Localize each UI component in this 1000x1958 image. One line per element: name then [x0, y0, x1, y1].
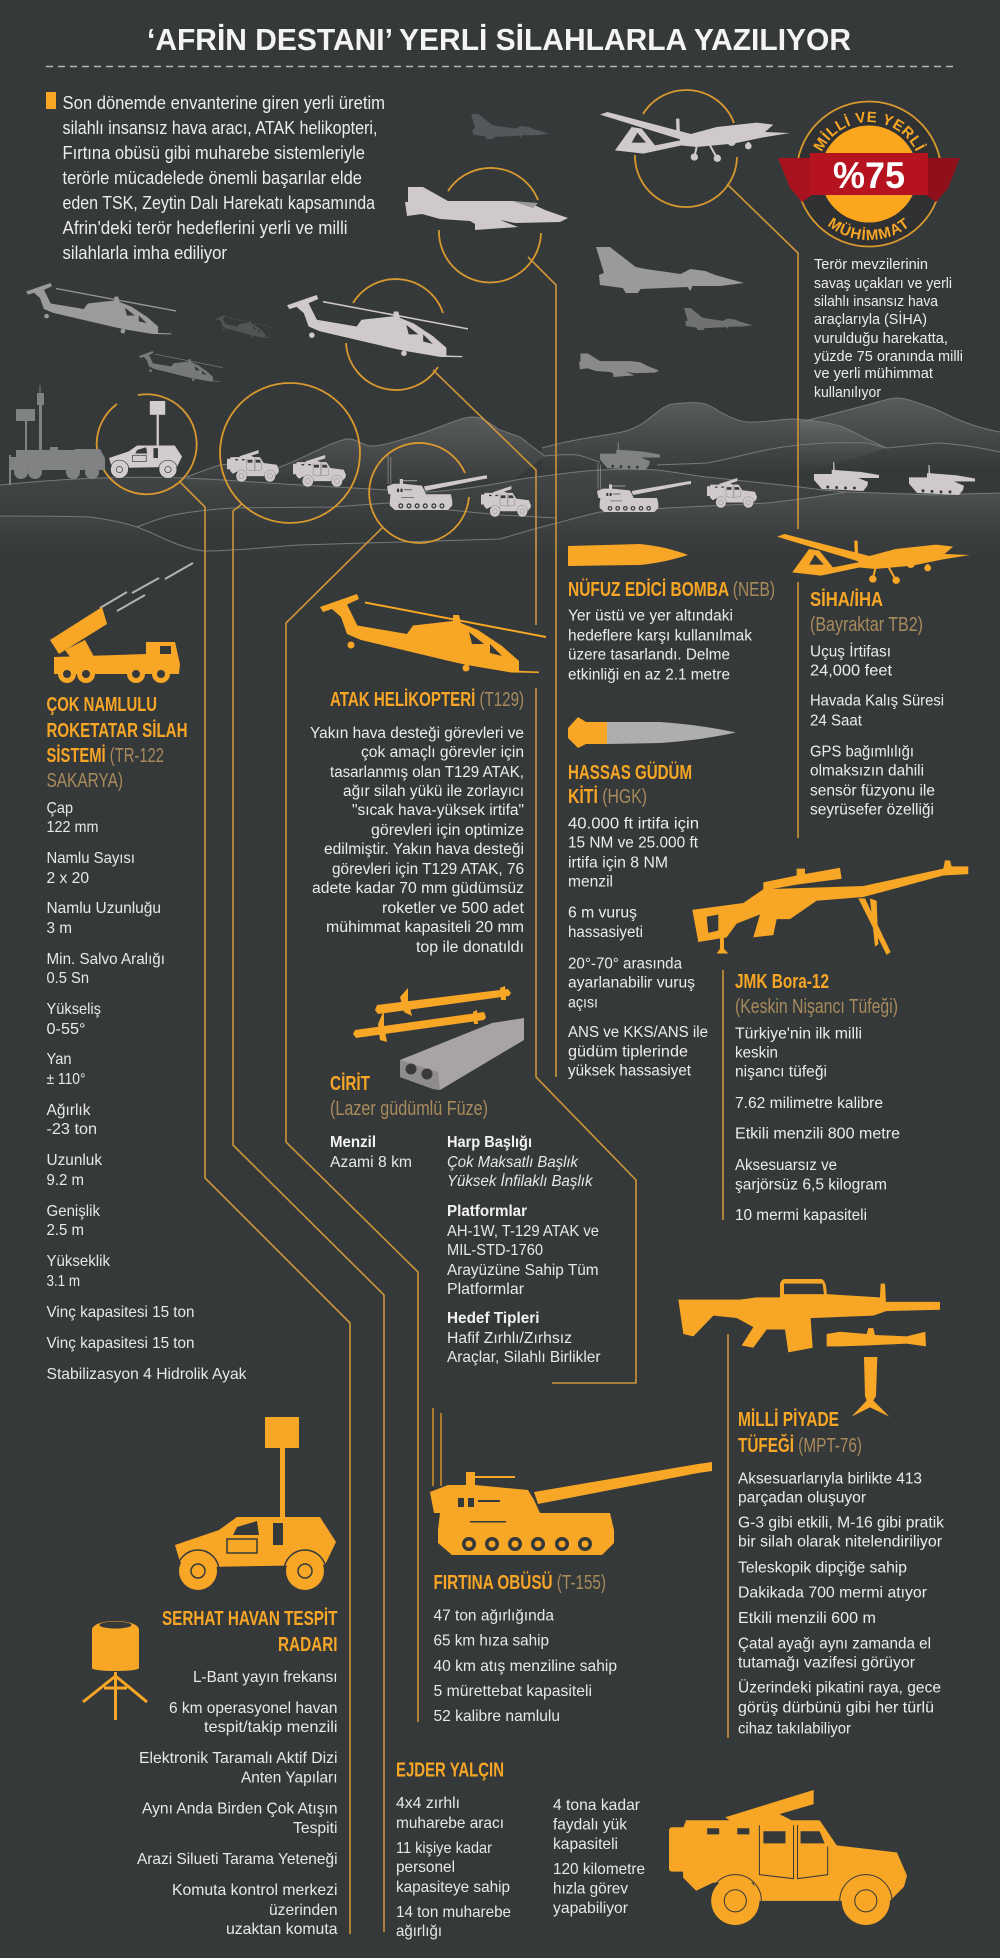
specifications: [330, 1134, 601, 1366]
description left column: 11 kişiye kadar: [396, 1840, 493, 1857]
terrain: mountain silhouettes: [0, 398, 1000, 560]
description left column: ağırlığı: [396, 1923, 442, 1940]
description: [738, 1470, 944, 1738]
specs list: 0.5 Sn: [46, 970, 89, 987]
description right column: [553, 1797, 645, 1917]
specifications: Hedef Tipleri: [447, 1310, 540, 1327]
specifications: Çok Maksatlı Başlık: [447, 1154, 579, 1171]
badge: 75% domestic munitions: MİLLİ VE YERLİ: [813, 112, 928, 152]
description: G-3 gibi etkili, M-16 gibi pratik: [738, 1514, 944, 1532]
description: güdüm tiplerinde: [568, 1044, 688, 1060]
specifications: Platformlar: [447, 1281, 525, 1298]
description: Arazi Silueti Tarama Yeteneği: [137, 1851, 338, 1868]
description: 7.62 milimetre kalibre: [735, 1095, 883, 1112]
description: roketler ve 500 adet: [382, 900, 525, 917]
heading: [568, 761, 692, 808]
description: 24,000 feet: [810, 662, 893, 680]
intro text block: silahlarla imha ediliyor: [62, 242, 227, 263]
specs list: Yükseliş: [46, 1001, 101, 1018]
description: adete kadar 70 mm güdümsüz: [312, 880, 524, 897]
specifications: Harp Başlığı: [447, 1134, 532, 1151]
description: 52 kalibre namlulu: [434, 1708, 560, 1725]
icon: ATAK helicopter: [320, 594, 546, 673]
description: "sıcak hava-yüksek irtifa": [352, 802, 524, 819]
description: görevleri için optimize: [371, 822, 524, 839]
description: Yer üstü ve yer altındaki: [568, 608, 733, 624]
description: nişancı tüfeği: [735, 1064, 827, 1080]
badge caption text: vurulduğu harekatta,: [814, 330, 948, 347]
description: 10 mermi kapasiteli: [735, 1207, 867, 1224]
panel: JMK Bora-12 sniper rifle: [692, 860, 968, 1224]
heading: CİRİT: [330, 1072, 370, 1095]
badge caption text: savaş uçakları ve yerli: [814, 275, 952, 292]
heading: KİTİ (HGK): [568, 785, 647, 808]
specs list: Yükseklik: [46, 1253, 111, 1270]
description: [137, 1669, 338, 1938]
specifications: AH-1W, T-129 ATAK ve: [447, 1223, 599, 1240]
heading: [162, 1607, 338, 1656]
heading: SERHAT HAVAN TESPİT: [162, 1607, 338, 1630]
specifications: Yüksek İnfilaklı Başlık: [447, 1171, 593, 1190]
specs list: 2.5 m: [46, 1222, 84, 1239]
heading: (Keskin Nişancı Tüfeği): [735, 996, 898, 1018]
description: Komuta kontrol merkezi: [172, 1882, 338, 1899]
description right column: 120 kilometre: [553, 1861, 645, 1878]
description left column: 14 ton muharebe: [396, 1904, 511, 1921]
specifications: Azami 8 km: [330, 1154, 412, 1171]
description: [810, 642, 944, 818]
description: [735, 1026, 900, 1224]
panel: NEB penetrator bomb: [568, 544, 775, 684]
description: çok amaçlı görevler için: [361, 744, 524, 761]
description: 6 km operasyonel havan: [169, 1700, 338, 1717]
specs list: Yan: [46, 1051, 72, 1068]
panel: ATAK helicopter T129: [310, 594, 546, 956]
aircraft silhouettes: [26, 112, 790, 382]
icon: MPT-76 rifle with scope and grip: [678, 1279, 940, 1417]
description: seyrüsefer özelliği: [810, 802, 934, 818]
badge caption text: araçlarıyla (SİHA): [814, 310, 927, 328]
description: üzere tasarlandı. Delme: [568, 646, 730, 664]
description: görevleri için T129 ATAK, 76: [332, 861, 524, 878]
heading: EJDER YALÇIN: [396, 1760, 504, 1782]
callout circles and connector lines: [97, 90, 798, 1934]
heading: HASSAS GÜDÜM: [568, 761, 692, 784]
description: ayarlanabilir vuruş: [568, 974, 695, 992]
description: yüksek hassasiyet: [568, 1062, 692, 1080]
description left column: personel: [396, 1859, 455, 1876]
intro text block: eden TSK, Zeytin Dalı Harekatı kapsamında: [62, 192, 376, 213]
icon: Ejder Yalcin vehicle: [669, 1790, 907, 1927]
description: Tespiti: [293, 1820, 338, 1837]
description: Etkili menzili 600 m: [738, 1610, 876, 1627]
description: Aksesuarlarıyla birlikte 413: [738, 1470, 922, 1488]
heading: (Bayraktar TB2): [810, 614, 923, 636]
specifications: Araçlar, Silahlı Birlikler: [447, 1349, 601, 1366]
description: Havada Kalış Süresi: [810, 692, 944, 710]
heading: ROKETATAR SİLAH: [46, 719, 188, 742]
badge caption text: silahlı insansız hava: [814, 293, 939, 310]
description: Elektronik Taramalı Aktif Dizi: [139, 1750, 338, 1767]
specs list: Vinç kapasitesi 15 ton: [46, 1304, 194, 1321]
specs list: -23 ton: [46, 1121, 97, 1138]
description: cihaz takılabiliyor: [738, 1720, 851, 1738]
heading: SİHA/İHA: [810, 588, 883, 611]
specs list: Çap: [46, 800, 73, 817]
icon: tripod radar: [83, 1621, 147, 1720]
specs list: Min. Salvo Aralığı: [46, 951, 165, 968]
specs list: 2 x 20: [46, 870, 89, 887]
description: edilmiştir. Yakın hava desteği: [324, 841, 524, 858]
description: L-Bant yayın frekansı: [193, 1669, 338, 1686]
description right column: faydalı yük: [553, 1816, 628, 1834]
panel: TR-122 Sakarya rocket launcher: [46, 563, 247, 1383]
description: Çatal ayağı aynı zamanda el: [738, 1636, 931, 1652]
specifications: Menzil: [330, 1134, 376, 1151]
specs list: 122 mm: [46, 819, 98, 836]
ground vehicles silhouettes: [9, 385, 975, 517]
description: açısı: [568, 994, 598, 1012]
icon: Firtina howitzer: [430, 1408, 712, 1555]
intro text block: Afrin'deki terör hedeflerini yerli ve milli: [62, 217, 348, 238]
description: 24 Saat: [810, 712, 863, 730]
description: olmaksızın dahili: [810, 762, 924, 780]
description left column: [396, 1795, 511, 1940]
description: 40 km atış menziline sahip: [434, 1658, 617, 1675]
description: Teleskopik dipçiğe sahip: [738, 1560, 907, 1576]
description: ANS ve KKS/ANS ile: [568, 1024, 708, 1041]
description: Anten Yapıları: [241, 1770, 338, 1786]
description: top ile donatıldı: [416, 939, 524, 956]
panel: Firtina howitzer T-155: [430, 1408, 712, 1725]
description: tespit/takip menzili: [204, 1719, 338, 1736]
icon: radar vehicle: [175, 1417, 336, 1592]
specs list: Vinç kapasitesi 15 ton: [46, 1335, 194, 1352]
description right column: hızla görev: [553, 1880, 628, 1898]
description: görüş dürbünü gibi her türlü: [738, 1700, 934, 1716]
badge caption text: ve yerli mühimmat: [814, 365, 934, 382]
badge: 75% domestic munitions: [778, 100, 960, 248]
heading: (Lazer güdümlü Füze): [330, 1098, 488, 1120]
description: [568, 816, 708, 1080]
description: irtifa için 8 NM: [568, 854, 668, 872]
icon: Bayraktar TB2 drone: [777, 534, 970, 584]
description: Dakikada 700 mermi atıyor: [738, 1584, 927, 1602]
icon: HGK bomb: [568, 717, 736, 748]
description left column: kapasiteye sahip: [396, 1879, 510, 1896]
title: ‘AFRİN DESTANI’ YERLİ SİLAHLARLA YAZILIYOR: [147, 22, 851, 57]
description: sensör füzyonu ile: [810, 782, 935, 800]
panel: MPT-76 infantry rifle: [678, 1279, 944, 1738]
heading: [330, 1072, 488, 1120]
description: tutamağı vazifesi görüyor: [738, 1654, 915, 1672]
description left column: 4x4 zırhlı: [396, 1795, 460, 1812]
heading: ATAK HELİKOPTERİ (T129): [330, 688, 524, 711]
heading: TÜFEĞİ (MPT-76): [738, 1433, 862, 1457]
specs list: Stabilizasyon 4 Hidrolik Ayak: [46, 1366, 247, 1383]
heading: [738, 1408, 862, 1457]
heading: SİSTEMİ (TR-122: [46, 744, 164, 767]
badge: 75% domestic munitions: MÜHİMMAT: [828, 217, 908, 240]
description: hassasiyeti: [568, 924, 643, 941]
specs list: Ağırlık: [46, 1102, 91, 1119]
badge caption text: Terör mevzilerinin: [814, 256, 928, 273]
description: 47 ton ağırlığında: [434, 1608, 554, 1624]
intro text block: Son dönemde envanterine giren yerli üretim: [62, 92, 385, 113]
specs list: Uzunluk: [46, 1152, 103, 1169]
heading: [810, 588, 923, 636]
description right column: yapabiliyor: [553, 1900, 629, 1917]
specifications: MIL-STD-1760: [447, 1242, 543, 1259]
description: 20°-70° arasında: [568, 956, 682, 972]
intro text block: silahlı insansız hava aracı, ATAK helikopteri,: [62, 117, 378, 138]
heading: RADARI: [278, 1634, 338, 1656]
description: uzaktan komuta: [226, 1921, 338, 1938]
heading: JMK Bora-12: [735, 971, 829, 993]
description: Etkili menzili 800 metre: [735, 1126, 900, 1142]
icon: missiles and launcher: [353, 986, 524, 1090]
badge: 75% domestic munitions: %75: [833, 155, 905, 196]
badge caption text: yüzde 75 oranında milli: [814, 348, 963, 365]
specifications: Platformlar: [447, 1203, 527, 1220]
description: Aksesuarsız ve: [735, 1157, 837, 1174]
icon: sniper rifle: [692, 860, 968, 955]
specs list: 3 m: [46, 920, 72, 937]
description: [568, 608, 752, 684]
icon: rocket launcher truck: [50, 563, 193, 683]
heading: [46, 694, 188, 792]
description: 5 mürettebat kapasiteli: [434, 1683, 592, 1700]
description: keskin: [735, 1044, 778, 1062]
intro text block: [46, 92, 385, 263]
description right column: kapasiteli: [553, 1836, 618, 1853]
panel: HGK precision guidance kit: [568, 717, 736, 1080]
description: Türkiye'nin ilk milli: [735, 1026, 862, 1042]
specs list: ± 110°: [46, 1071, 86, 1088]
intro text block: Fırtına obüsü gibi muharebe sistemleriyle: [62, 142, 365, 163]
description: Uçuş İrtifası: [810, 642, 891, 660]
specs list: [46, 800, 247, 1383]
specs list: 9.2 m: [46, 1172, 84, 1189]
specifications: Hafif Zırhlı/Zırhsız: [447, 1330, 572, 1347]
description: [434, 1608, 617, 1725]
description: parçadan oluşuyor: [738, 1490, 866, 1506]
panel: Cirit laser guided missile: [330, 986, 601, 1366]
description: 40.000 ft irtifa için: [568, 816, 699, 832]
heading: MİLLİ PİYADE: [738, 1408, 839, 1431]
description: GPS bağımlılığı: [810, 744, 914, 760]
description: Yakın hava desteği görevleri ve: [310, 725, 524, 742]
description: mühimmat kapasiteli 20 mm: [326, 919, 524, 936]
description: 15 NM ve 25.000 ft: [568, 834, 699, 852]
specs list: 0-55°: [46, 1021, 86, 1038]
description: etkinliği en az 2.1 metre: [568, 666, 730, 684]
description: hedeflere karşı kullanılmak: [568, 628, 752, 644]
panel: Serhat mortar detection radar: [83, 1417, 338, 1938]
panel: Ejder Yalcin armored vehicle: [396, 1760, 907, 1940]
specs list: Genişlik: [46, 1203, 101, 1220]
description: tasarlanmış olan T129 ATAK,: [330, 764, 524, 781]
description: Aynı Anda Birden Çok Atışın: [142, 1800, 338, 1818]
heading: NÜFUZ EDİCİ BOMBA (NEB): [568, 578, 775, 601]
heading: [735, 971, 898, 1018]
specs list: Namlu Uzunluğu: [46, 900, 161, 917]
intro text block: terörle mücadelede önemli başarılar elde: [62, 167, 362, 188]
description: 65 km hıza sahip: [434, 1632, 549, 1650]
specifications: Arayüzüne Sahip Tüm: [447, 1262, 598, 1279]
description: Üzerindeki pikatini raya, gece: [738, 1678, 941, 1696]
specs list: 3.1 m: [46, 1273, 80, 1290]
description: 6 m vuruş: [568, 904, 637, 922]
icon: NEB bomb: [568, 544, 688, 566]
heading: ÇOK NAMLULU: [46, 694, 157, 716]
description: [310, 725, 525, 956]
panel: Bayraktar TB2: [777, 534, 970, 818]
badge caption text: [814, 256, 963, 401]
description: menzil: [568, 874, 613, 890]
badge caption text: kullanılıyor: [814, 384, 881, 401]
heading: FIRTINA OBÜSÜ (T-155): [434, 1571, 606, 1594]
specs list: Namlu Sayısı: [46, 850, 135, 867]
description: üzerinden: [269, 1902, 338, 1919]
description right column: 4 tona kadar: [553, 1797, 641, 1814]
description left column: muharebe aracı: [396, 1815, 504, 1832]
description: ağır silah yükü ile zorlayıcı: [343, 783, 524, 800]
heading: SAKARYA): [46, 770, 123, 792]
description: bir silah olarak nitelendiriliyor: [738, 1534, 942, 1550]
description: şarjörsüz 6,5 kilogram: [735, 1176, 887, 1194]
